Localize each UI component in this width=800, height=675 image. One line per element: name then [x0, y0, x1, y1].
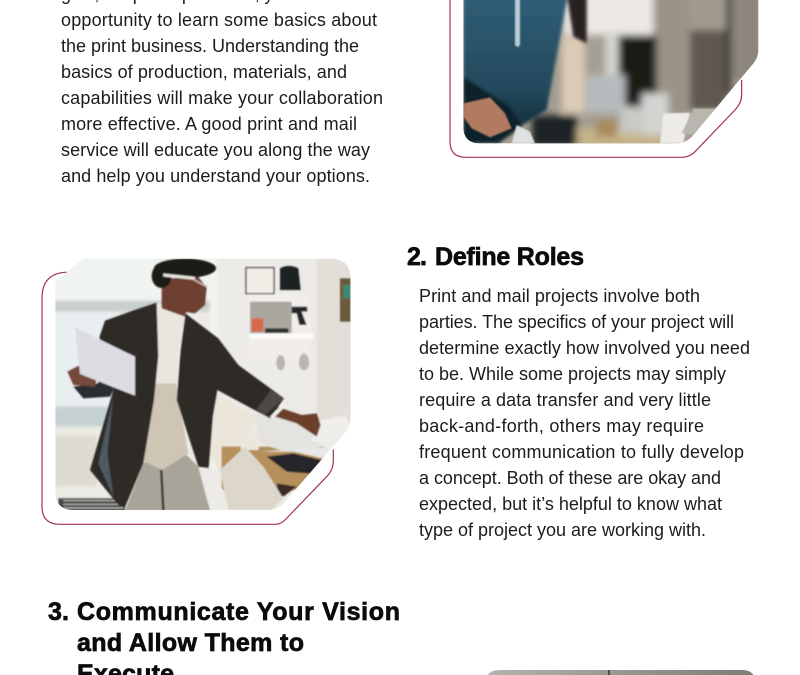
- text block: step 1 body: [61, 0, 383, 186]
- blazer right panel: [177, 313, 284, 468]
- papers and hand: [67, 365, 97, 387]
- text block: step 1 body: capabilities will make your collaboration: [61, 88, 383, 108]
- text block: step 2 body: require a data transfer and very little: [419, 390, 711, 410]
- text block: step 2 body: back-and-forth, others may require: [419, 416, 704, 436]
- heading: step 3: Communicate Your Vision: [77, 598, 400, 626]
- text block: step 2 body: expected, but it’s helpful to know what: [419, 494, 722, 514]
- sleeve holding paper: [72, 380, 114, 400]
- reaching hand: [275, 407, 321, 437]
- pegboard shelf: [248, 293, 310, 362]
- text block: step 2 body: parties. The specifics of your project will: [419, 312, 734, 332]
- image: photo 2 scene: [53, 257, 353, 513]
- text block: step 1 body: basics of production, materials, and: [61, 62, 347, 82]
- text block: step 1 body: service will educate you along the way: [61, 140, 370, 160]
- heading: step 2: 2.: [407, 243, 427, 271]
- heading: step 3: [48, 598, 400, 675]
- text block: step 1 body: the print business. Understanding the: [61, 36, 359, 56]
- blazer left panel: [90, 303, 158, 507]
- outline: photo 1 frame: [450, 0, 742, 157]
- text block: step 1 body: opportunity to learn some basics about: [61, 10, 377, 30]
- text block: step 2 body: determine exactly how involved you need: [419, 338, 750, 358]
- heading: step 3: and Allow Them to: [77, 629, 304, 657]
- text block: step 2 body: frequent communication to fully develop: [419, 442, 744, 462]
- outline: photo 2 frame: [42, 272, 333, 524]
- text block: step 2 body: to be. While some projects may simply: [419, 364, 726, 384]
- text block: step 2 body: type of project you are working with.: [419, 520, 706, 540]
- photo: step 3 image top edge: [486, 670, 755, 675]
- head: [162, 275, 207, 317]
- desk and printer: [222, 447, 325, 490]
- text block: step 2 body: a concept. Both of these are okay and: [419, 468, 721, 488]
- shirt: [154, 302, 186, 470]
- heading: step 2: Define Roles: [435, 243, 584, 271]
- photo: woman in black blazer holding papers by a printer: [42, 257, 353, 524]
- pillow and chair: [220, 447, 283, 510]
- text block: step 2 body: [419, 286, 750, 540]
- text block: step 1 body: and help you understand your options.: [61, 166, 370, 186]
- trousers: [125, 453, 210, 511]
- text block: step 1 body: more effective. A good print and mail: [61, 114, 357, 134]
- heading: step 3: 3.: [48, 598, 69, 626]
- image: photo 1 scene: [463, 0, 762, 148]
- photo: person in denim shirt at a print shop: [450, 0, 762, 157]
- text block: step 2 body: Print and mail projects involve both: [419, 286, 700, 306]
